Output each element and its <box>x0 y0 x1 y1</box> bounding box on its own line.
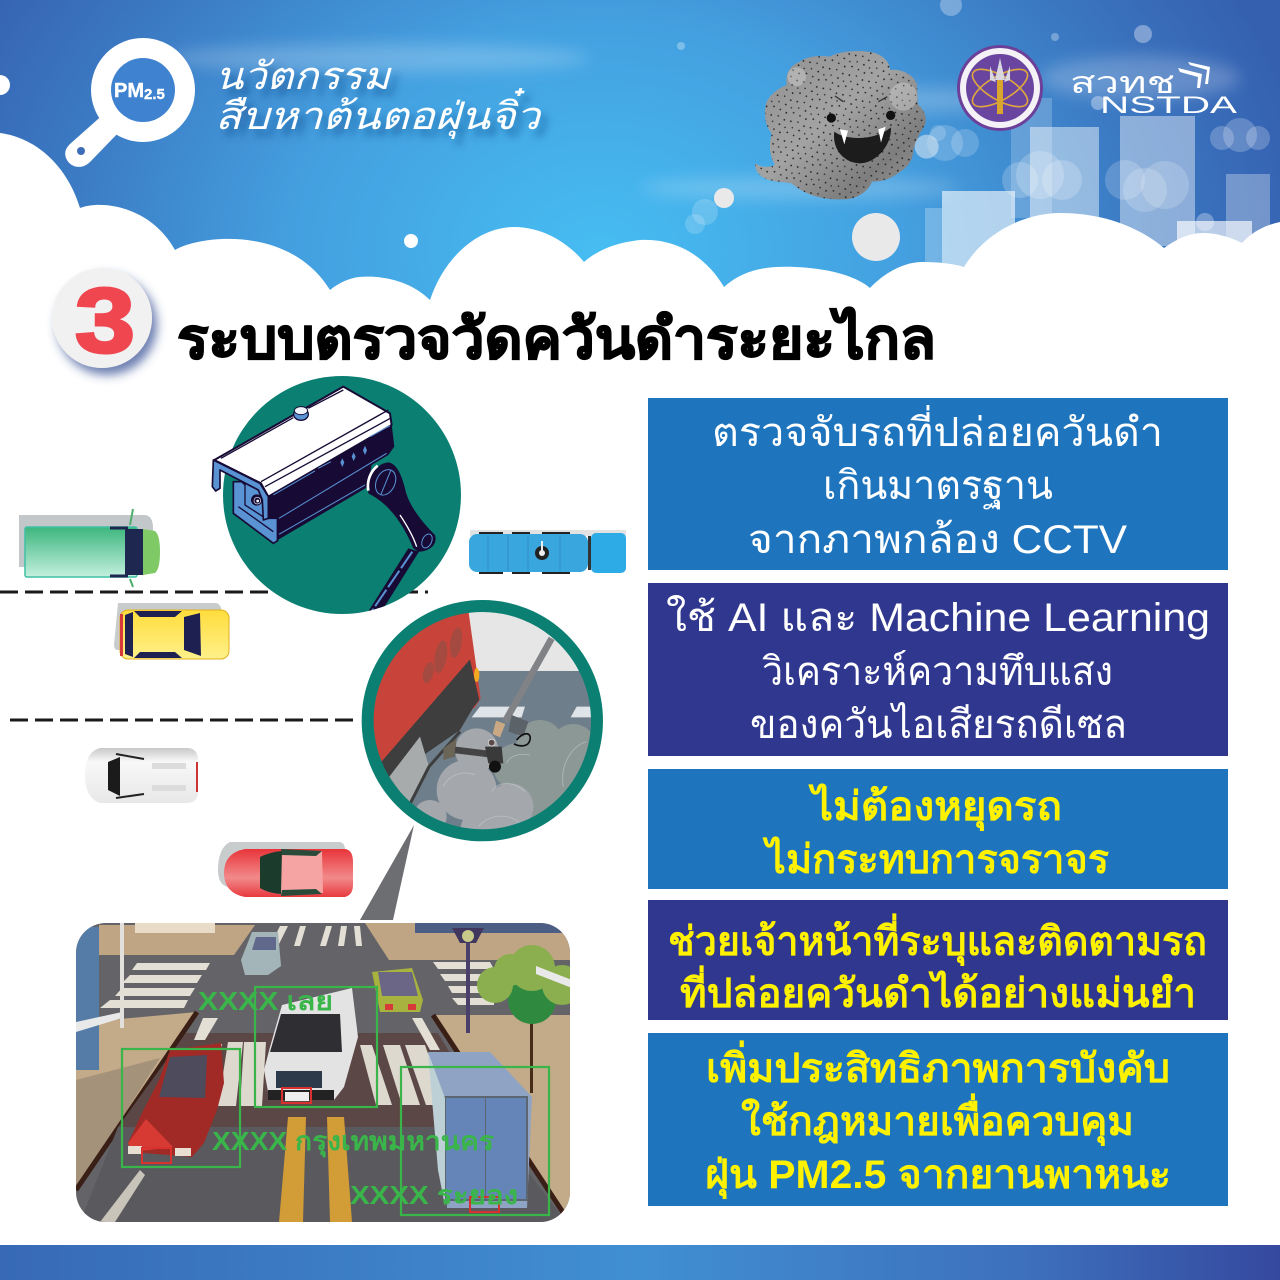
road lane dashes <box>0 592 428 720</box>
car: white <box>85 748 198 803</box>
top crosswalk <box>270 926 362 946</box>
small grey car <box>241 932 281 975</box>
info panel 3: ไม่ต้องหยุดรถ <box>808 783 1062 832</box>
info panel 2: ของควันไอเสียรถดีเซล <box>750 702 1127 747</box>
info panel 3: ไม่กระทบการจราจร <box>762 836 1110 882</box>
plate labels: XXXX กรุงเทพมหานคร <box>212 1126 494 1158</box>
red car <box>128 1043 224 1157</box>
white van <box>264 988 358 1101</box>
plate labels <box>198 986 518 1210</box>
small translucent clouds and dust <box>677 0 1270 234</box>
CCTV camera disc <box>212 376 461 617</box>
series title: สืบหาต้นตอฝุ่นจิ๋ว <box>215 88 543 139</box>
info panel 5 <box>648 1033 1228 1206</box>
footer band <box>0 1245 1280 1280</box>
series title: นวัตกรรม <box>215 56 392 98</box>
sky background <box>0 0 1280 320</box>
info panel 1: ตรวจจับรถที่ปล่อยควันดำ <box>712 405 1163 455</box>
logo: magnifier: PM <box>114 80 144 102</box>
white dust dots <box>0 75 900 261</box>
left crosswalk <box>100 963 210 1008</box>
street scene with detection boxes <box>76 923 582 1222</box>
street lamp <box>452 928 484 1033</box>
exhaust probe disc <box>362 601 602 867</box>
blue box truck <box>428 1052 532 1208</box>
info panel 5: ฝุ่น PM2.5 จากยานพาหนะ <box>705 1153 1171 1200</box>
main heading: ระบบตรวจวัดควันดำระยะไกล <box>177 306 936 370</box>
info panel 2 <box>648 583 1228 756</box>
step number badge: 3 <box>75 270 135 372</box>
brown band <box>118 1033 450 1127</box>
car: red <box>218 842 353 897</box>
info panel 2: วิเคราะห์ความทึบแสง <box>762 649 1113 694</box>
logo: NSTDA: สวทช <box>1070 67 1175 100</box>
central crosswalk <box>212 1042 432 1106</box>
leader wedge <box>360 825 414 920</box>
plate labels: XXXX เลย <box>198 986 333 1016</box>
car: yellow <box>114 603 229 659</box>
small yellow car <box>372 968 423 1012</box>
logo: magnifier <box>65 38 195 167</box>
info panel 5: ใช้กฎหมายเพื่อควบคุม <box>741 1093 1134 1147</box>
logo: NSTDA <box>1070 62 1237 119</box>
info panel 4: ช่วยเจ้าหน้าที่ระบุและติดตามรถ <box>668 913 1207 967</box>
info panel 1: เกินมาตรฐาน <box>823 464 1053 510</box>
soft haze streaks <box>170 44 1240 199</box>
logo: magnifier: 2.5 <box>144 86 165 103</box>
info panel 4 <box>648 900 1228 1020</box>
right crosswalk <box>433 962 494 1005</box>
skyline buildings <box>925 98 1270 271</box>
info panel 1: จากภาพกล้อง CCTV <box>748 518 1127 562</box>
info panel 4: ที่ปล่อยควันดำได้อย่างแม่นยำ <box>680 965 1196 1016</box>
licence plate frames <box>142 1088 499 1212</box>
info panel 1 <box>648 398 1228 570</box>
series title <box>215 56 543 139</box>
tree <box>477 945 570 1093</box>
info panel 3 <box>648 769 1228 889</box>
detection frames <box>122 987 549 1215</box>
truck: blue tanker <box>469 530 626 573</box>
truck: green <box>19 509 160 587</box>
logo: NSTDA: NSTDA <box>1100 92 1237 119</box>
road base <box>76 923 570 1222</box>
info panel 5: เพิ่มประสิทธิภาพการบังคับ <box>706 1040 1170 1091</box>
step number badge <box>52 268 152 372</box>
info panel 2: ใช้ AI และ Machine Learning <box>666 594 1210 640</box>
PM2.5 cloud mascot <box>755 51 939 199</box>
logo: ministry seal <box>957 45 1043 131</box>
plate labels: XXXX ระยอง <box>350 1180 518 1210</box>
